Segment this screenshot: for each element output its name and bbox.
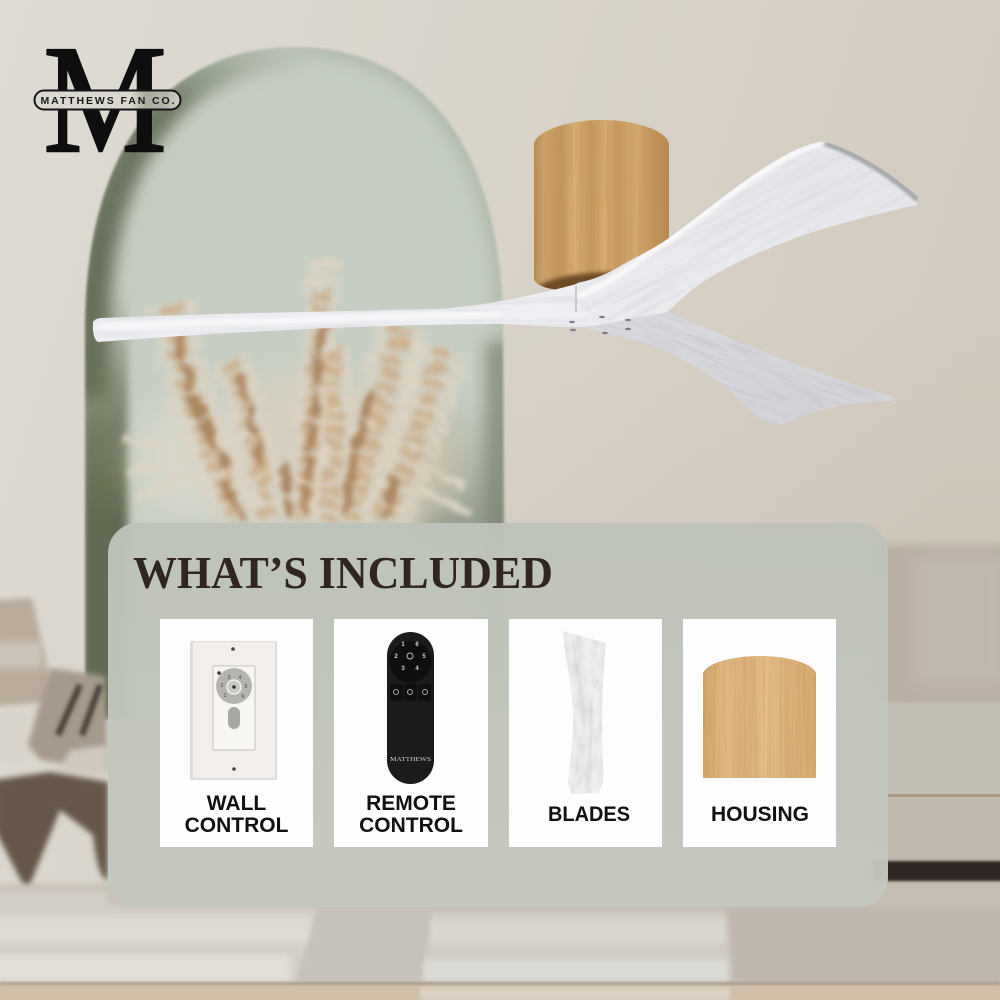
heading: WHAT’S INCLUDED: [133, 547, 553, 598]
card: blades: [509, 619, 662, 847]
fan housing: [534, 118, 670, 300]
blade: upper right: [576, 142, 918, 325]
green arch alcove: [82, 47, 515, 720]
icon: wall control: 4: [239, 675, 242, 681]
pampas grass: [125, 262, 470, 530]
logo: Matthews Fan Co.: M: [44, 15, 166, 185]
card: housing: [683, 619, 836, 847]
icon: housing swatch: [702, 655, 817, 779]
card: wall control: [160, 619, 313, 847]
label: REMOTE: [366, 792, 456, 815]
icon: wall control: 6: [242, 694, 245, 700]
icon: remote: 1: [401, 642, 405, 648]
icon: remote: 5: [422, 654, 426, 660]
icon: wall control: 3: [228, 675, 231, 681]
icon: remote: 4: [415, 666, 419, 672]
icon: wall control: [190, 641, 277, 780]
blade: lower right: [583, 312, 895, 425]
label: CONTROL: [359, 814, 463, 837]
icon: remote: 3: [401, 666, 405, 672]
icon: wall control: 1: [224, 693, 227, 699]
logo: Matthews Fan Co.: MATTHEWS FAN CO.: [40, 95, 175, 107]
hub seam and screws: [569, 286, 631, 334]
icon: wall control: 2: [221, 683, 224, 689]
panel: what's included: [108, 523, 888, 907]
ceiling fan: [92, 120, 918, 425]
left sofa and blanket: [0, 598, 108, 892]
label: BLADES: [548, 803, 630, 826]
label: CONTROL: [185, 814, 289, 837]
floor and rug: [0, 884, 1000, 1000]
blade: left: [92, 284, 600, 342]
icon: wall control: 5: [245, 684, 248, 690]
label: WALL: [207, 792, 266, 815]
icon: blade: [563, 631, 606, 794]
icon: remote: MATTHEWS: [390, 756, 431, 763]
icon: remote: 6: [415, 642, 419, 648]
card: remote control: [334, 619, 488, 847]
icon: remote: [387, 632, 434, 784]
right sofa: [872, 545, 1000, 881]
icon: remote: 2: [394, 654, 398, 660]
label: HOUSING: [711, 803, 809, 826]
